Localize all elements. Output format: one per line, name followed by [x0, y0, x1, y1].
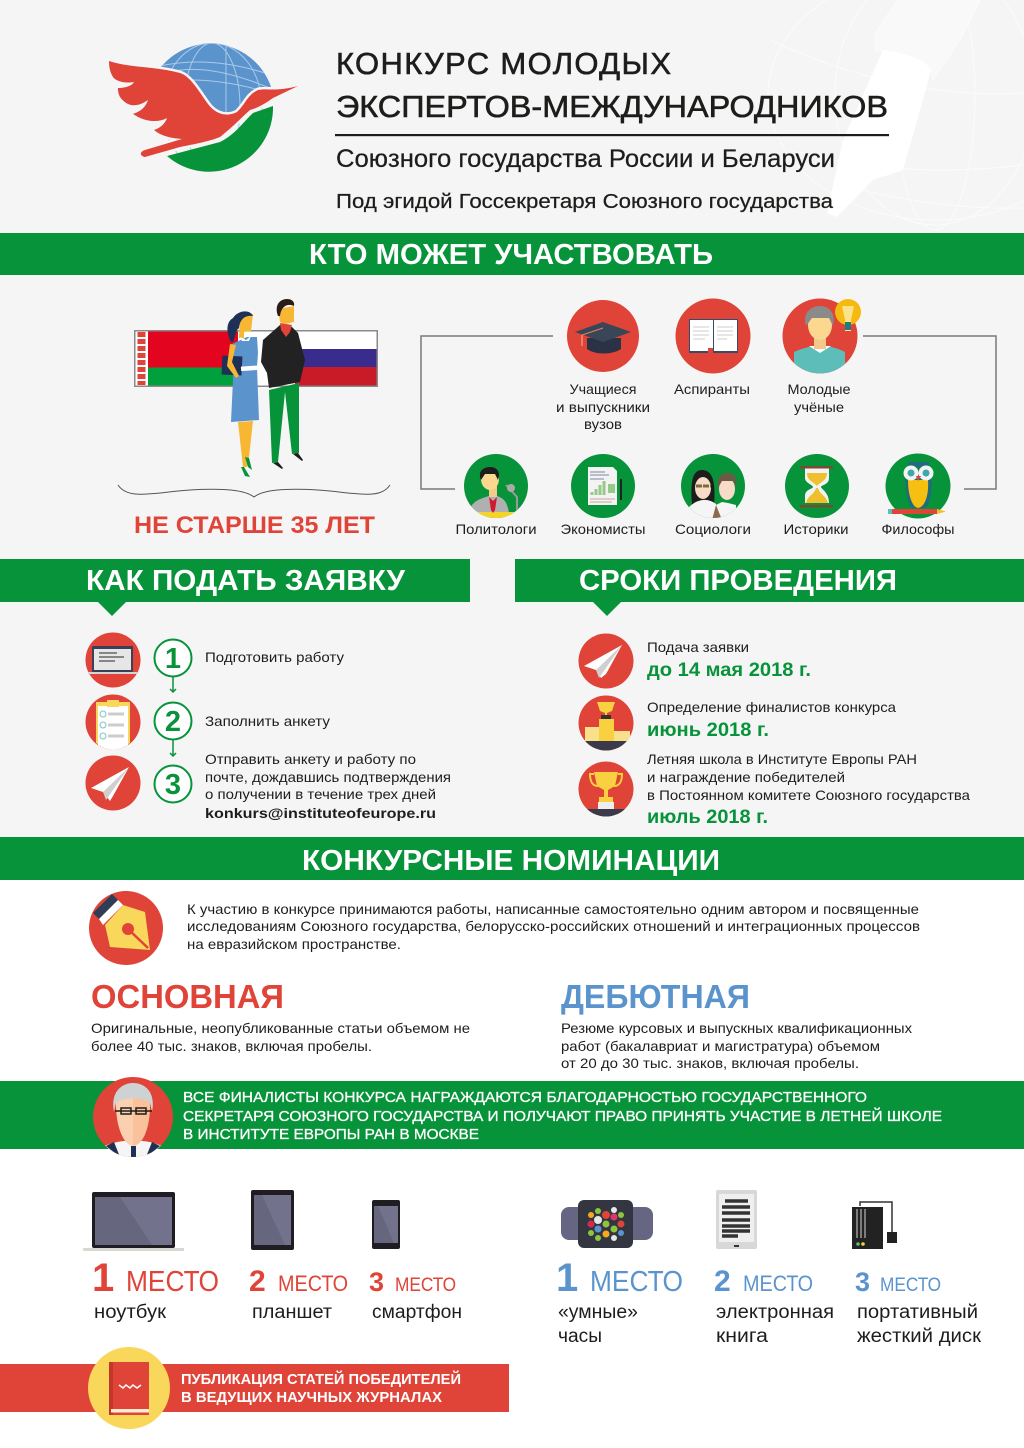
date: summer school: в Постоянном комитете Союзного государства — [647, 787, 970, 803]
nominations intro text: К участию в конкурсе принимаются работы, написанные самостоятельно одним автором и посвященные — [187, 901, 919, 917]
title: Под эгидой Госсекретаря Союзного государства — [336, 191, 834, 213]
date: summer school: июль 2018 г. — [647, 807, 768, 828]
nominations intro text — [187, 901, 920, 952]
main nomination: ОСНОВНАЯ — [91, 978, 284, 1015]
prize: tablet — [249, 1265, 348, 1323]
title: Союзного государства России и Беларуси — [336, 145, 835, 173]
date: application — [647, 639, 811, 681]
age brace — [118, 485, 390, 497]
label: sociologists: Социологи — [675, 521, 751, 537]
icon: podium — [578, 696, 634, 753]
icon: portable hard drive — [852, 1202, 897, 1249]
icon: journal book — [88, 1347, 170, 1429]
arrow 2 to 3 — [170, 740, 176, 756]
debut nomination: Резюме курсовых и выпускных квалификационных — [561, 1020, 912, 1036]
label: historians: Историки — [784, 521, 848, 537]
label: postgraduates: Аспиранты — [674, 381, 750, 397]
prize: hard drive: 3 — [855, 1267, 870, 1297]
prize: laptop — [92, 1256, 219, 1323]
icon: sociologists — [681, 454, 745, 520]
section header: who can participate: КТО МОЖЕТ УЧАСТВОВАТЬ — [309, 239, 713, 271]
publication banner — [0, 1364, 509, 1412]
background watermark: globe and pen — [768, 0, 1024, 230]
main nomination: более 40 тыс. знаков, включая пробелы. — [91, 1038, 372, 1054]
prize: smartwatch — [556, 1256, 683, 1347]
date: application: Подача заявки — [647, 639, 749, 655]
prize: laptop: ноутбук — [94, 1302, 167, 1323]
prize: smartphone: МЕСТО — [395, 1275, 456, 1296]
date: summer school: Летняя школа в Институте Европы РАН — [647, 751, 917, 767]
label: students: Учащиеся — [570, 381, 636, 397]
label: students: и выпускники — [556, 399, 650, 415]
debut nomination: работ (бакалавриат и магистратура) объемом — [561, 1038, 880, 1054]
icon: open book — [676, 298, 750, 374]
step 3 text — [205, 751, 451, 821]
prize: e-book: электронная — [716, 1302, 834, 1323]
section header: who can participate — [0, 233, 1024, 275]
prize: e-book: 2 — [714, 1265, 731, 1298]
section header: dates: СРОКИ ПРОВЕДЕНИЯ — [579, 565, 897, 597]
publication banner: ПУБЛИКАЦИЯ СТАТЕЙ ПОБЕДИТЕЛЕЙ — [181, 1370, 461, 1388]
prize: smartphone — [369, 1267, 462, 1323]
step badge 2: 2 — [165, 706, 181, 738]
icon: state secretary portrait — [93, 1077, 173, 1160]
step 3 text: Отправить анкету и работу по — [205, 751, 416, 767]
flags — [134, 330, 378, 387]
prize: hard drive — [855, 1267, 982, 1347]
step badge 2 — [154, 702, 192, 740]
debut nomination: от 20 до 30 тыс. знаков, включая пробелы. — [561, 1055, 859, 1071]
step 3 text: о получении в течение трех дней — [205, 786, 436, 802]
title: КОНКУРС МОЛОДЫХ — [336, 46, 671, 81]
icon: paper plane — [86, 756, 140, 810]
icon: owl philosopher — [886, 454, 950, 518]
section header: nominations — [0, 837, 1024, 880]
icon: economist — [571, 454, 635, 518]
age limit label: НЕ СТАРШЕ 35 ЛЕТ — [134, 512, 375, 539]
icon: laptop prize — [83, 1192, 184, 1251]
icon: pen nib — [89, 891, 163, 965]
icon: political scientist — [464, 454, 528, 520]
logo: crane and globe — [109, 43, 298, 172]
prize: tablet: МЕСТО — [278, 1271, 348, 1296]
step badge 3 — [154, 766, 192, 802]
prize: smartwatch: часы — [558, 1326, 602, 1347]
prize: e-book: книга — [716, 1326, 768, 1347]
label: young scientists: Молодые — [788, 381, 851, 397]
icon: graduation cap — [567, 300, 639, 372]
label: philosophers: Философы — [882, 521, 954, 537]
icon: smartwatch — [561, 1200, 653, 1248]
icon: trophy — [578, 762, 634, 819]
publication banner: В ВЕДУЩИХ НАУЧНЫХ ЖУРНАЛАХ — [181, 1389, 442, 1406]
step badge 3: 3 — [165, 769, 181, 801]
icon: clipboard — [86, 694, 140, 750]
prize: laptop: МЕСТО — [126, 1266, 219, 1298]
label: political scientists: Политологи — [456, 521, 536, 537]
date: summer school: и награждение победителей — [647, 769, 845, 785]
prize: laptop: 1 — [92, 1256, 114, 1300]
prize: e-book: МЕСТО — [743, 1271, 813, 1296]
main nomination — [91, 978, 470, 1054]
step 3 text: konkurs@instituteofeurope.ru — [205, 805, 436, 821]
prize: hard drive: портативный — [857, 1302, 978, 1323]
step 1 text: Подготовить работу — [205, 649, 344, 665]
prize: e-book — [714, 1265, 834, 1347]
debut nomination — [561, 978, 912, 1071]
section header: how to apply — [0, 559, 470, 616]
date: summer school — [647, 751, 970, 828]
icon: hourglass — [785, 454, 849, 518]
prize: hard drive: МЕСТО — [880, 1275, 941, 1296]
woman figure — [221, 311, 259, 477]
icon: e-book reader — [716, 1190, 757, 1249]
icon: paper plane dates — [578, 634, 634, 688]
debut nomination: ДЕБЮТНАЯ — [561, 978, 750, 1015]
prize: smartphone: 3 — [369, 1267, 384, 1297]
label: economists: Экономисты — [560, 521, 646, 537]
date: finalists: июнь 2018 г. — [647, 720, 769, 741]
prize: smartwatch: «умные» — [558, 1302, 638, 1323]
finalists banner — [0, 1081, 1024, 1149]
label: students: вузов — [584, 416, 622, 432]
step badge 1 — [154, 640, 192, 676]
step badge 1: 1 — [165, 643, 181, 675]
label: young scientists — [788, 381, 851, 415]
section header: how to apply: КАК ПОДАТЬ ЗАЯВКУ — [86, 565, 406, 597]
finalists banner: СЕКРЕТАРЯ СОЮЗНОГО ГОСУДАРСТВА И ПОЛУЧАЮТ ПРАВО ПРИНЯТЬ УЧАСТИЕ В ЛЕТНЕЙ ШКОЛЕ — [183, 1107, 942, 1125]
date: finalists: Определение финалистов конкурса — [647, 699, 896, 715]
title — [335, 46, 889, 213]
label: students — [556, 381, 650, 432]
title: ЭКСПЕРТОВ-МЕЖДУНАРОДНИКОВ — [336, 89, 888, 124]
prize: smartwatch: 1 — [556, 1256, 578, 1300]
icon: laptop — [86, 632, 140, 688]
man figure — [261, 299, 305, 469]
step 3 text: почте, дождавшись подтверждения — [205, 769, 451, 785]
date: application: до 14 мая 2018 г. — [647, 660, 811, 681]
finalists banner: В ИНСТИТУТЕ ЕВРОПЫ РАН В МОСКВЕ — [183, 1126, 479, 1143]
prize: tablet: планшет — [252, 1302, 332, 1323]
step 2 text: Заполнить анкету — [205, 713, 330, 729]
prize: smartphone: смартфон — [372, 1302, 462, 1323]
prize: tablet: 2 — [249, 1265, 266, 1298]
date: finalists — [647, 699, 896, 741]
prize: smartwatch: МЕСТО — [590, 1266, 683, 1298]
main nomination: Оригинальные, неопубликованные статьи объемом не — [91, 1020, 470, 1036]
icon: young scientist — [782, 298, 861, 380]
prize: hard drive: жесткий диск — [857, 1326, 982, 1347]
icon: smartphone prize — [372, 1200, 400, 1249]
finalists banner: ВСЕ ФИНАЛИСТЫ КОНКУРСА НАГРАЖДАЮТСЯ БЛАГОДАРНОСТЬЮ ГОСУДАРСТВЕННОГО — [183, 1089, 867, 1106]
arrow 1 to 2 — [170, 677, 176, 692]
nominations intro text: на евразийском пространстве. — [187, 936, 401, 952]
label: young scientists: учёные — [794, 399, 844, 415]
section header: dates — [515, 559, 1024, 616]
icon: tablet prize — [251, 1190, 294, 1250]
bracket lines — [421, 336, 996, 489]
nominations intro text: исследованиям Союзного государства, белорусско-российских отношений и интеграционных процессов — [187, 918, 920, 934]
section header: nominations: КОНКУРСНЫЕ НОМИНАЦИИ — [302, 845, 720, 877]
